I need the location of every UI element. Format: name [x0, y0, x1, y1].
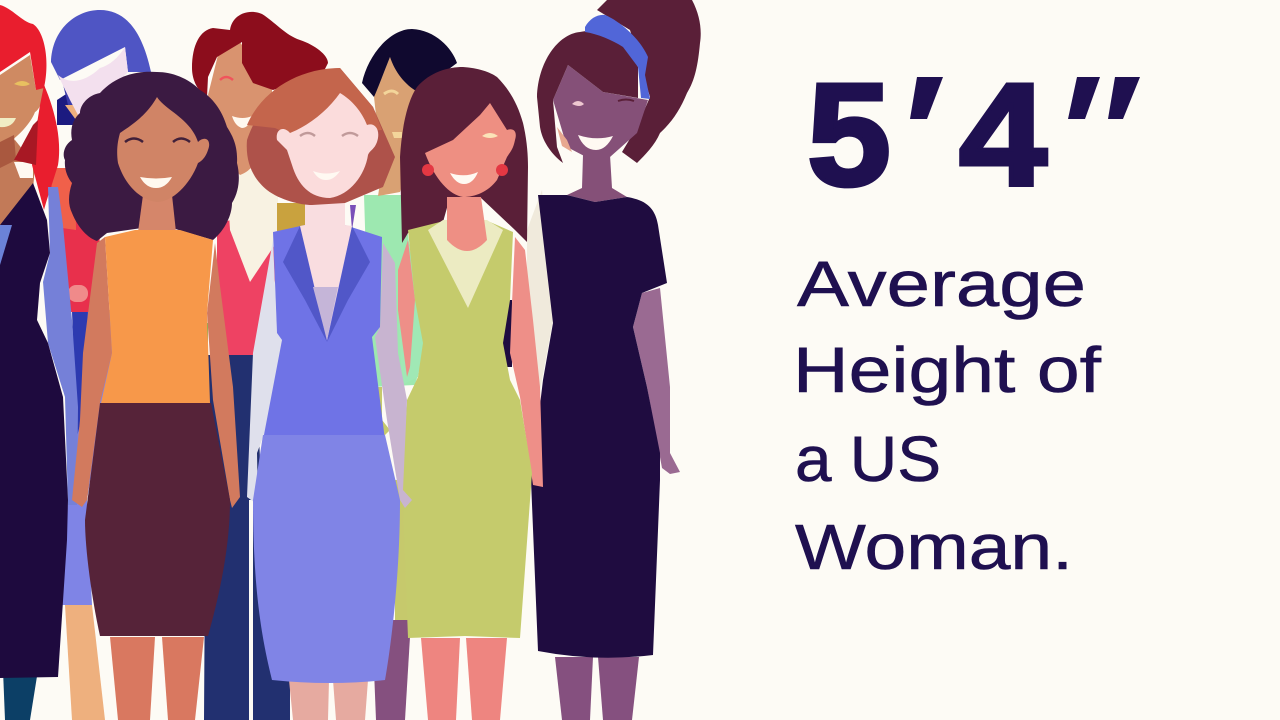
woman: curly hair, orange top and brown skirt: [64, 72, 240, 720]
caption: Average Height of a US Woman: Woman.: [795, 511, 1073, 583]
caption: Average Height of a US Woman: Average: [797, 248, 1086, 320]
caption: Average Height of a US Woman: [793, 248, 1101, 583]
woman: auburn hair, blue dress: [247, 68, 412, 720]
woman: red hair, navy dress, far left: [0, 5, 78, 720]
woman: long brown hair, green dress: [398, 67, 543, 720]
woman: black hair, mint top, back row: [350, 29, 457, 720]
caption: Average Height of a US Woman: Height of: [793, 334, 1101, 406]
woman: blue hair, back row: [47, 10, 151, 720]
caption: Average Height of a US Woman: a US: [795, 423, 941, 495]
height figure: 5 foot 4 inches: [807, 53, 1140, 216]
illustration: group of smiling women: [0, 0, 701, 720]
woman: blue ribbon and ponytail, black dress: [503, 0, 701, 720]
woman: red-brown hair, back row: [192, 12, 328, 720]
height figure: 5 foot 4 inches: 5: [807, 53, 891, 216]
height figure: 5 foot 4 inches: 4: [959, 53, 1047, 216]
prime marks: [910, 77, 1140, 119]
